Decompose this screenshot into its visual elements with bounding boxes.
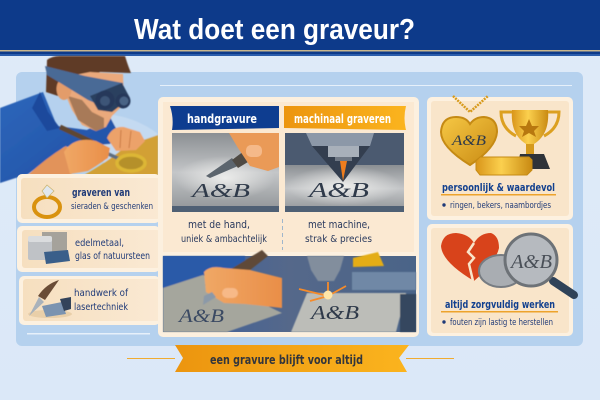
text: met de hand	[181, 219, 267, 245]
main blue panel	[16, 72, 583, 346]
tab: machinaal graveren: machinaal graveren	[294, 111, 391, 126]
icon: silver coin	[479, 255, 523, 287]
tab: machinaal graveren	[284, 106, 406, 130]
label: altijd zorgvuldig werken: altijd zorgvuldig werken	[445, 298, 555, 311]
card: edelmetaal	[17, 226, 160, 272]
card: handwerk	[19, 276, 160, 325]
bullet: ringen: ringen, bekers, naambordjes	[450, 201, 551, 211]
image: machine engraving	[285, 133, 404, 212]
icon: heart locket: A&B	[451, 133, 486, 149]
label: altijd zorgvuldig werken	[441, 298, 558, 312]
label: handwerk	[74, 288, 129, 313]
icon: heart locket	[441, 96, 497, 165]
label: graveren van: sieraden & geschenken	[71, 202, 153, 212]
label: edelmetaal: edelmetaal,	[75, 238, 124, 249]
label: persoonlijk en waardevol: persoonlijk & waardevol	[442, 181, 555, 194]
icon: magnifying glass: A&B	[509, 251, 552, 273]
label: handwerk: lasertechniek	[74, 302, 128, 313]
label: edelmetaal: glas of natuursteen	[75, 251, 150, 262]
illustration: engraver at work	[0, 56, 158, 183]
panel: comparison	[158, 97, 419, 337]
icon: magnifying glass	[505, 234, 574, 295]
icon: name plate	[476, 157, 532, 175]
panel: altijd zorgvuldig werken	[427, 224, 574, 336]
text: met de hand: uniek & ambachtelijk	[181, 234, 267, 245]
header band	[0, 0, 600, 56]
label: edelmetaal	[75, 238, 150, 262]
text: met machine: met machine,	[308, 219, 370, 231]
image: hand and laser scene	[163, 250, 416, 332]
banner: slogan: een gravure blijft voor altijd	[210, 353, 363, 367]
icon: material blocks	[28, 232, 70, 264]
image: machine engraving: A&B	[306, 178, 369, 202]
image: hand engraving	[172, 133, 279, 212]
label: graveren van: graveren van	[72, 187, 130, 199]
icon: ring	[34, 185, 60, 217]
icon: trophy	[501, 110, 559, 169]
card: graveren van	[17, 174, 160, 223]
title: Wat doet een graveur?	[134, 14, 415, 46]
tab: handgravure	[170, 106, 279, 130]
banner: slogan	[127, 345, 454, 372]
icon: graver and blocks	[28, 280, 72, 318]
image: hand and laser scene: A&B	[309, 302, 359, 324]
image: hand and laser scene: A&B	[177, 306, 224, 327]
label: handwerk: handwerk of	[74, 288, 129, 299]
text: met de hand: met de hand,	[188, 219, 250, 231]
text: met machine: strak & precies	[305, 234, 372, 245]
label: graveren van	[71, 187, 153, 212]
icon: broken heart	[441, 233, 499, 281]
tab: handgravure: handgravure	[187, 111, 257, 126]
bullet: fouten: fouten zijn lastig te herstellen	[450, 318, 553, 328]
text: met machine	[305, 219, 372, 245]
label: persoonlijk en waardevol	[441, 181, 556, 196]
image: hand engraving: A&B	[189, 180, 250, 202]
panel: persoonlijk en waardevol	[427, 96, 573, 220]
